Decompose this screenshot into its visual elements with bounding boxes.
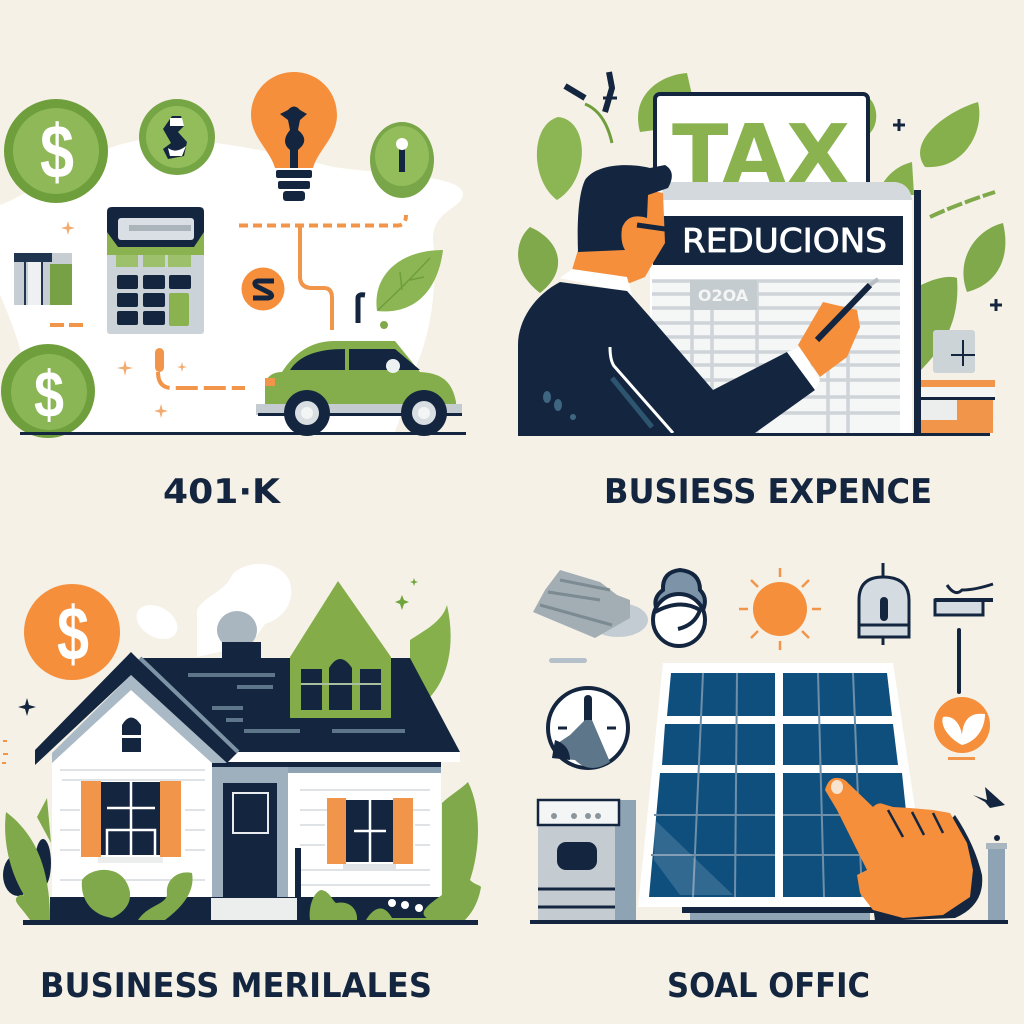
baseline <box>23 920 478 925</box>
ground and steps <box>50 897 443 920</box>
heading: business expence: BUSIESS EXPENCE <box>604 472 932 512</box>
document: O2OA <box>698 286 749 305</box>
icon: house <box>35 581 460 920</box>
icon: meter <box>859 563 909 645</box>
icon: orange dollar coin: $ <box>57 592 89 677</box>
window right <box>327 798 413 870</box>
door <box>223 783 277 898</box>
panel: solar <box>530 563 1008 924</box>
panel: business expense <box>518 72 1005 436</box>
heading: soal offic: SOAL OFFIC <box>667 966 870 1006</box>
document: REDUCIONS <box>682 221 887 260</box>
icon: light bulb <box>251 72 337 201</box>
dormer <box>290 581 391 718</box>
heading: business merilales: BUSINESS MERILALES <box>40 966 432 1006</box>
icon: dollar coin top left <box>4 99 108 203</box>
sparkles <box>61 221 187 418</box>
icon: plane arrow <box>973 787 1005 808</box>
icon: leaves behind <box>518 72 1005 370</box>
heading: 401.K: 401·K <box>163 472 282 512</box>
connector: orange line from bulb to car <box>239 215 406 330</box>
clouds <box>197 564 291 657</box>
icon: stove <box>538 800 636 920</box>
panel: 401k <box>0 72 466 438</box>
baseline <box>518 433 990 436</box>
icon: lock <box>653 570 705 646</box>
panel: house <box>2 564 481 925</box>
document <box>650 182 921 433</box>
icon: green car <box>256 341 462 436</box>
icon: calculator <box>107 207 204 334</box>
icon: solar panel <box>638 663 930 921</box>
connector: lower dashed line <box>50 325 245 388</box>
icon: leaf <box>358 250 443 329</box>
bushes <box>3 782 481 920</box>
icon: tool <box>935 584 993 692</box>
leaf behind roof <box>410 605 451 697</box>
figure: accountant <box>518 165 878 435</box>
chimney <box>217 611 257 649</box>
icon: pointing hand <box>825 778 982 921</box>
baseline <box>20 432 466 435</box>
icon: seedling badge <box>934 697 990 760</box>
icon: sun <box>739 568 821 650</box>
TAX sheet: TAX <box>672 108 850 203</box>
icon: dollar coin bottom left: $ <box>34 357 64 431</box>
window left <box>81 781 181 863</box>
icon: orange dollar coin <box>24 584 120 680</box>
icon: dollar coin top left: $ <box>40 110 74 195</box>
icon: green coin right <box>370 122 434 198</box>
icon: bar building <box>14 253 72 305</box>
pill <box>549 658 587 663</box>
icon: orange S badge <box>242 268 284 310</box>
books and mug <box>921 330 995 433</box>
icon: dollar coin small <box>139 99 215 175</box>
icon: papers stack <box>533 570 648 638</box>
icon: dollar coin bottom left <box>1 344 95 438</box>
sparkles <box>2 578 418 763</box>
post <box>986 835 1007 920</box>
baseline <box>530 920 1008 924</box>
icon: clock <box>548 688 628 768</box>
